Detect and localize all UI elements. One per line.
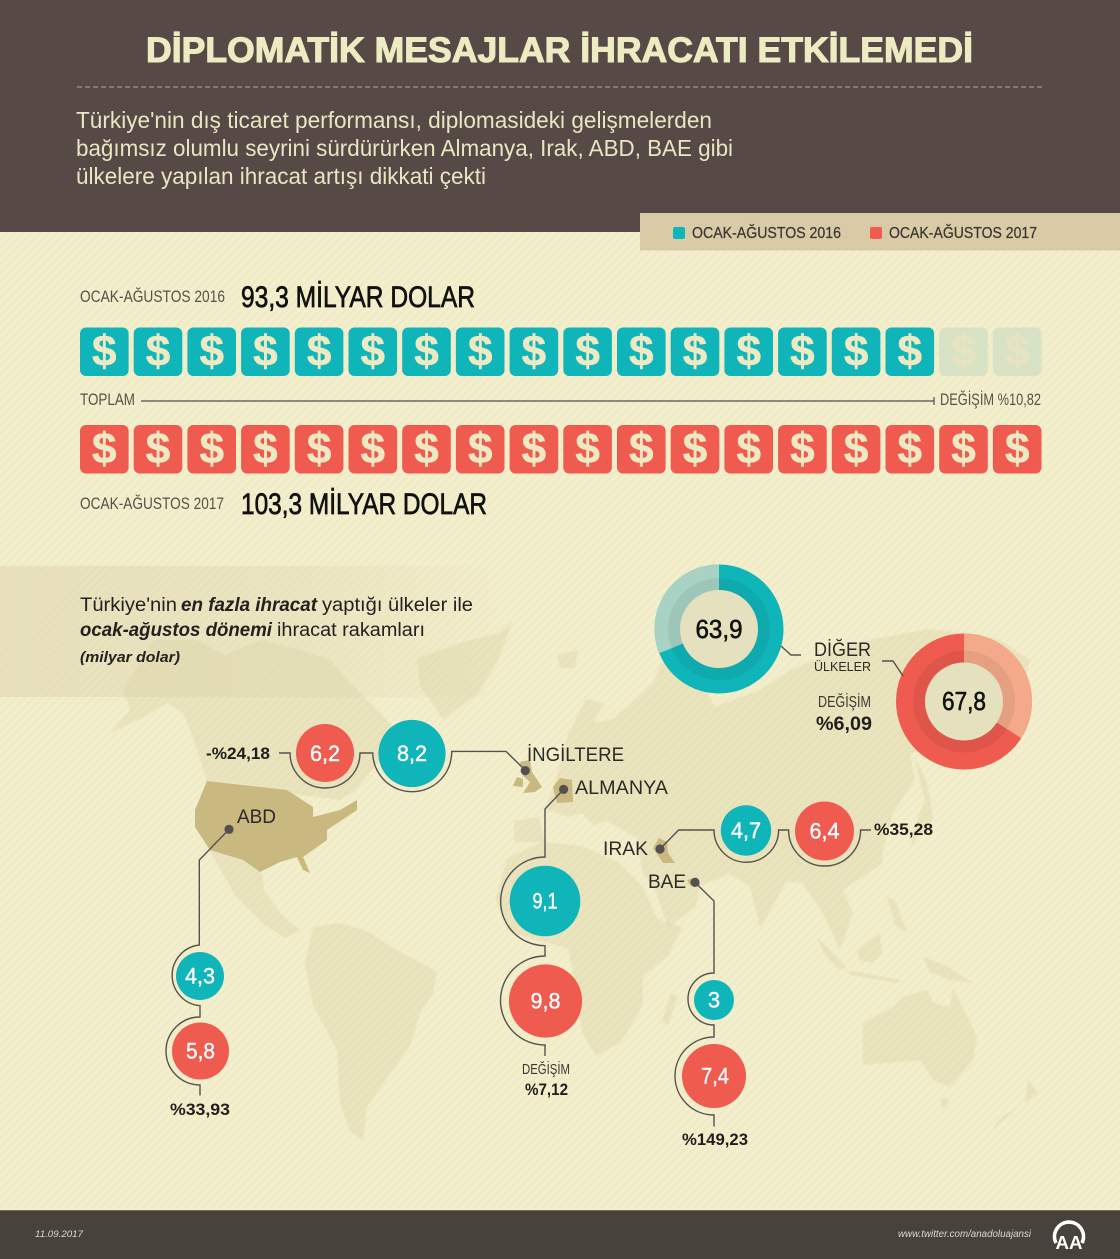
- section intro band: (milyar dolar): [80, 649, 180, 666]
- dollar tiles 2017: $: [468, 424, 492, 474]
- callout: USA: [166, 807, 276, 1119]
- callout: UAE: 7,4: [701, 1064, 729, 1088]
- dollar tiles 2016: $: [253, 327, 278, 376]
- country: UAE: [687, 877, 700, 885]
- dollar tiles 2016: $: [92, 327, 117, 376]
- country: USA: [195, 781, 357, 873]
- total change line: DEĞİŞİM %10,82: [940, 390, 1041, 409]
- callout: Germany: 9,8: [530, 988, 560, 1014]
- callout: UAE: [648, 872, 748, 1149]
- callout: Germany: %7,12: [525, 1080, 568, 1099]
- donut: other countries 2016: [654, 564, 784, 694]
- callout: Iraq: [603, 802, 933, 866]
- header subtitle: [76, 107, 733, 189]
- section intro band: [0, 566, 520, 697]
- country: Iraq: [653, 838, 675, 863]
- dollar tiles 2017: $: [629, 424, 654, 474]
- section intro band: ihracat rakamları: [277, 620, 425, 641]
- dollar tiles 2016: $: [951, 327, 976, 376]
- country: UK: [513, 760, 542, 793]
- callout: Iraq: %35,28: [874, 820, 933, 839]
- dollar tiles 2016: $: [307, 327, 331, 376]
- icon: AA logo: AA: [1056, 1233, 1082, 1253]
- dollar tiles 2016: $: [414, 327, 439, 376]
- dollar tiles 2016: $: [468, 327, 492, 376]
- heading: 2016 total: 93,3 MİLYAR DOLAR: [241, 281, 475, 314]
- dollar tiles 2017: $: [844, 424, 868, 474]
- legend: [640, 213, 1120, 250]
- header subtitle: bağımsız olumlu seyrini sürdürürken Almanya, Irak, ABD, BAE gibi: [76, 135, 733, 161]
- dollar tiles 2016: $: [146, 327, 170, 376]
- callout: USA: ABD: [237, 807, 276, 828]
- section intro band: yaptığı ülkeler ile: [322, 595, 473, 616]
- heading: 2017 total: OCAK-AĞUSTOS 2017: [80, 494, 224, 513]
- callout: UAE: BAE: [648, 872, 686, 893]
- footer: 11.09.2017: [35, 1229, 84, 1240]
- dollar tiles 2016: $: [790, 327, 815, 376]
- dollar tiles 2017: $: [951, 424, 976, 474]
- total change line: TOPLAM: [80, 390, 135, 409]
- callout: UK: -%24,18: [206, 744, 270, 763]
- header subtitle: ülkelere yapılan ihracat artışı dikkati çekti: [76, 163, 486, 189]
- dollar tiles 2016: $: [629, 327, 654, 376]
- heading: 2017 total: 103,3 MİLYAR DOLAR: [241, 488, 487, 521]
- dollar tiles 2016: $: [844, 327, 868, 376]
- legend: OCAK-AĞUSTOS 2017: [889, 223, 1037, 242]
- donut: other countries 2016: 63,9: [696, 614, 742, 644]
- callout: Germany: DEĞİŞİM: [522, 1060, 570, 1078]
- donut: other countries 2017: 67,8: [942, 686, 986, 716]
- dollar tiles 2017: $: [199, 424, 224, 474]
- dollar tiles 2017: $: [790, 424, 815, 474]
- callout: UAE: %149,23: [682, 1130, 748, 1149]
- callout: Iraq: 6,4: [810, 818, 840, 844]
- section intro band: ocak-ağustos dönemi: [80, 620, 273, 641]
- dollar tiles 2017: $: [92, 424, 117, 474]
- dollar tiles 2016: $: [898, 327, 922, 376]
- dollar tiles 2016: $: [575, 327, 600, 376]
- callout: other countries: DİĞER: [814, 639, 871, 661]
- dollar tiles 2016: $: [683, 327, 707, 376]
- donut: other countries 2017: [896, 633, 1032, 770]
- dollar tiles 2017: [80, 424, 1042, 474]
- callout: USA: 5,8: [186, 1038, 215, 1064]
- dollar tiles 2017: $: [683, 424, 707, 474]
- heading: 2016 total: OCAK-AĞUSTOS 2016: [80, 287, 225, 306]
- callout: UAE: 3: [708, 988, 720, 1012]
- callout: other countries: [781, 639, 903, 735]
- map highlight: countries: [195, 760, 700, 885]
- callout: USA: 4,3: [185, 964, 215, 988]
- world map background: [110, 621, 1038, 1140]
- header panel: [0, 0, 1120, 232]
- footer: www.twitter.com/anadoluajansi: [898, 1229, 1032, 1240]
- heading: 2017 total: [80, 488, 487, 521]
- callout: other countries: DEĞİŞİM: [818, 692, 871, 711]
- callout: UK: 6,2: [310, 741, 340, 766]
- callout: Iraq: IRAK: [603, 839, 648, 860]
- dollar tiles 2017: $: [736, 424, 761, 474]
- dollar tiles 2017: $: [307, 424, 331, 474]
- dollar tiles 2017: $: [253, 424, 278, 474]
- dollar tiles 2017: $: [522, 424, 546, 474]
- footer: [0, 1210, 1120, 1259]
- dollar tiles 2016: $: [361, 327, 385, 376]
- callout: USA: %33,93: [170, 1100, 230, 1119]
- dollar tiles 2017: $: [898, 424, 922, 474]
- callout: other countries: ÜLKELER: [814, 659, 871, 674]
- dollar tiles 2016: $: [736, 327, 761, 376]
- total change line: [80, 390, 1041, 409]
- dollar tiles 2016: $: [199, 327, 224, 376]
- dollar tiles 2017: $: [146, 424, 170, 474]
- dollar tiles 2016: $: [522, 327, 546, 376]
- section intro band: en fazla ihracat: [181, 595, 318, 616]
- callout: UK: [206, 720, 624, 792]
- callout: Iraq: 4,7: [731, 818, 761, 843]
- icon: AA logo: [1054, 1222, 1084, 1253]
- callout: Germany: [501, 778, 668, 1099]
- legend: OCAK-AĞUSTOS 2016: [692, 223, 841, 242]
- heading: 2016 total: [80, 281, 475, 314]
- header subtitle: Türkiye'nin dış ticaret performansı, diplomasideki gelişmelerden: [76, 107, 712, 133]
- dollar tiles 2017: $: [414, 424, 439, 474]
- country: Germany: [553, 778, 573, 803]
- dollar tiles 2017: $: [361, 424, 385, 474]
- title: DİPLOMATİK MESAJLAR İHRACATI ETKİLEMEDİ: [146, 31, 973, 70]
- callout: other countries: %6,09: [816, 714, 872, 735]
- callout: UK: İNGİLTERE: [527, 745, 624, 766]
- callout: Germany: 9,1: [532, 888, 558, 914]
- callout: UK: 8,2: [397, 741, 427, 766]
- callout: Germany: ALMANYA: [575, 778, 668, 799]
- dollar tiles 2017: $: [1005, 424, 1029, 474]
- section intro band: Türkiye'nin: [80, 595, 177, 616]
- dollar tiles 2016: $: [1005, 327, 1029, 376]
- dollar tiles 2017: $: [575, 424, 600, 474]
- dollar tiles 2016: [80, 327, 1042, 376]
